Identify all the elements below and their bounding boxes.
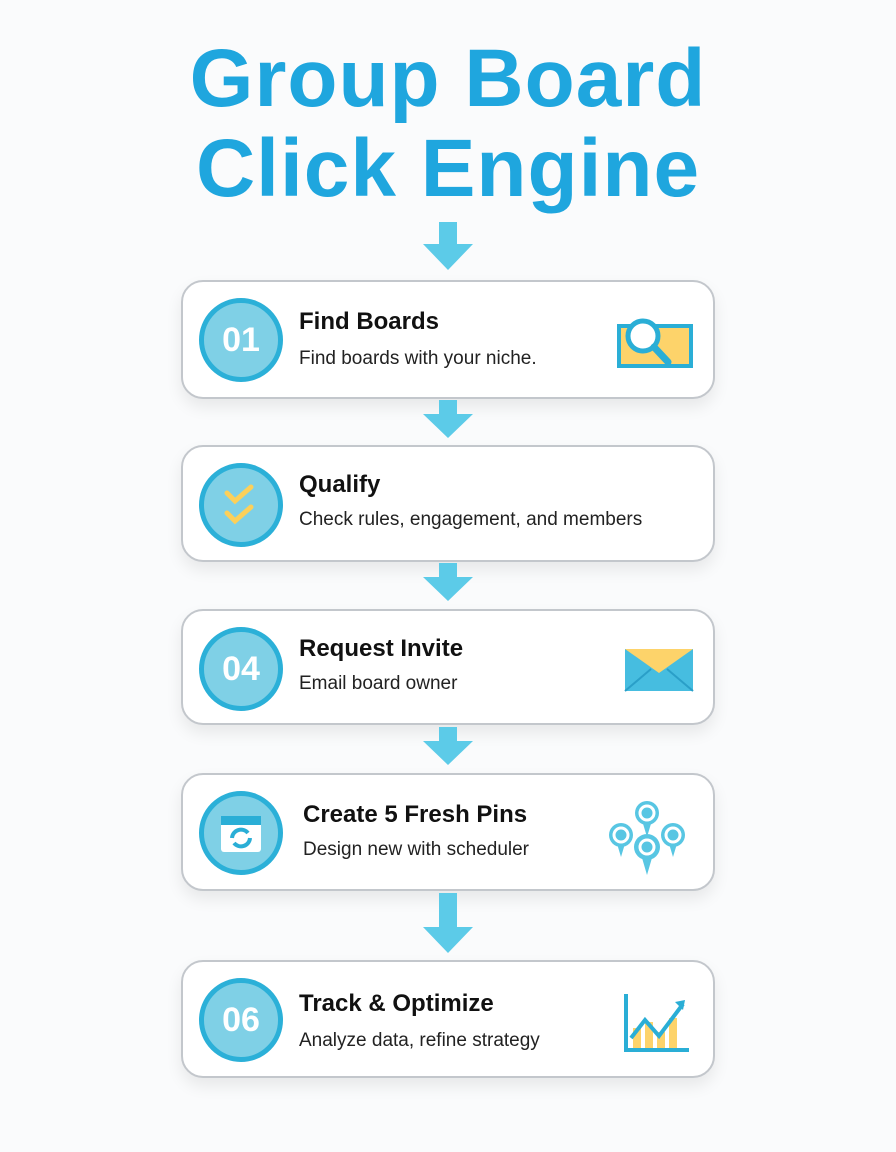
text: request invite: Email board owner	[299, 673, 457, 694]
arrow	[423, 727, 473, 765]
number: 01	[199, 298, 283, 382]
arrow	[423, 893, 473, 953]
heading: Request Invite: Request Invite	[299, 635, 463, 662]
icon: chart	[624, 994, 689, 1052]
number: 04	[199, 627, 283, 711]
panel: qualify	[181, 445, 715, 562]
panel: find boards	[181, 280, 715, 399]
text: track: Analyze data, refine strategy	[299, 1030, 540, 1051]
number: 06	[199, 978, 283, 1062]
icon: search folder	[617, 318, 693, 368]
number: 04: 04	[222, 650, 260, 688]
arrow	[423, 563, 473, 601]
icon: pins	[609, 801, 685, 875]
heading: Find Boards: Find Boards	[299, 308, 439, 335]
heading: Create 5 Fresh Pins: Create 5 Fresh Pins	[303, 801, 527, 828]
icon: envelope	[624, 649, 694, 692]
panel: request invite	[181, 609, 715, 725]
panel: track	[181, 960, 715, 1078]
title: Click Engine	[196, 123, 700, 214]
text: find boards: Find boards with your niche.	[299, 348, 537, 369]
panel: create pins	[181, 773, 715, 891]
arrow: top	[423, 222, 473, 270]
text: create pins: Design new with scheduler	[303, 839, 529, 860]
icon: checks	[199, 463, 283, 547]
icon: calendar	[199, 791, 283, 875]
number: 06: 06	[222, 1000, 260, 1038]
heading: Qualify: Qualify	[299, 471, 380, 498]
text: qualify: Check rules, engagement, and members	[299, 509, 642, 530]
title	[190, 33, 706, 214]
title: Group Board	[190, 33, 706, 124]
arrow	[423, 400, 473, 438]
heading: Track & Optimize: Track & Optimize	[299, 990, 494, 1017]
number: 01: 01	[222, 320, 260, 358]
